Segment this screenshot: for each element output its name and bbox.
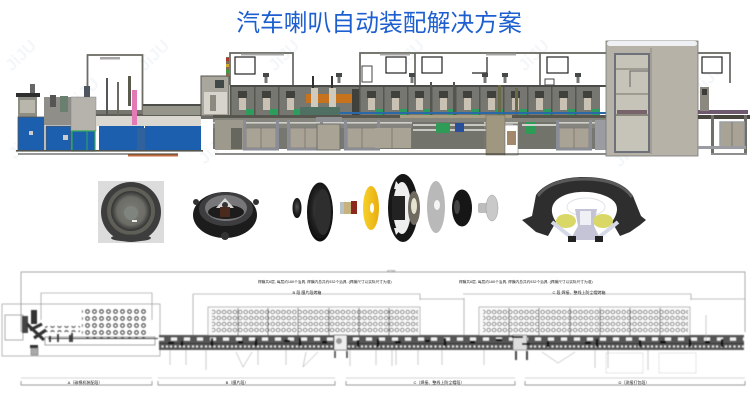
- watermark: JiJU: [514, 36, 553, 75]
- watermark: JiJU: [609, 132, 648, 171]
- drawing notes and section labels: 焊膜共6层, 每层约160个治具, 焊膜内总共约932个治具. (焊膜尺寸以实际尺寸为准): [459, 279, 593, 284]
- speaker cross section: [522, 177, 646, 242]
- layout drawing: [2, 269, 745, 385]
- drawing notes and section labels: A（碳棉机装配段）: [68, 379, 102, 385]
- drawing: conveyor belts: [159, 335, 744, 360]
- production line illustration: [16, 41, 750, 156]
- drawing notes and section labels: [68, 279, 649, 385]
- machine: lower benches: [213, 115, 606, 155]
- speaker photo: coaxial speaker: [193, 192, 259, 240]
- watermark: [1, 36, 728, 171]
- watermark: JiJU: [64, 74, 103, 113]
- watermark: JiJU: [689, 59, 728, 98]
- machine: assembly stations: [213, 73, 606, 121]
- drawing: section A winding unit: [2, 293, 160, 356]
- machine: left blue feeding section: [16, 55, 203, 156]
- drawing notes and section labels: B 段 膜片段烤箱: [293, 289, 321, 295]
- watermark: JiJU: [4, 124, 43, 163]
- drawing notes and section labels: C 段 焊接、整线上防尘帽烤箱: [552, 289, 606, 295]
- watermark: JiJU: [194, 129, 233, 168]
- drawing notes and section labels: 焊膜共6层, 每层约160个治具, 焊膜内总共约932个治具. (焊膜尺寸以实际尺寸为准): [258, 279, 392, 284]
- watermark: JiJU: [134, 36, 173, 75]
- watermark: JiJU: [264, 36, 303, 75]
- machine: transfer cabinet: [201, 57, 234, 119]
- title: 汽车喇叭自动装配解决方案: [236, 10, 522, 37]
- drawing: overall dimension frame: [21, 269, 745, 332]
- watermark: JiJU: [389, 36, 428, 75]
- drawing: section dimension brackets: [21, 378, 745, 385]
- machine: outfeed conveyor: [698, 87, 750, 155]
- machine: overhead frames: [230, 53, 730, 85]
- drawing: ovens: [193, 294, 745, 337]
- drawing: callout leader lines: [170, 315, 706, 373]
- speaker photo: mounted woofer: [98, 181, 164, 243]
- drawing: overall dimension frame: 47700: [387, 269, 396, 273]
- machine: enclosed cabinet: [606, 41, 698, 156]
- drawing notes and section labels: D（测报打包段）: [619, 379, 649, 385]
- drawing notes and section labels: B（膜片段）: [226, 379, 248, 385]
- drawing notes and section labels: C（焊接、整线上防尘帽段）: [414, 379, 464, 385]
- watermark: JiJU: [1, 36, 40, 75]
- speaker parts: exploded view: [292, 174, 498, 242]
